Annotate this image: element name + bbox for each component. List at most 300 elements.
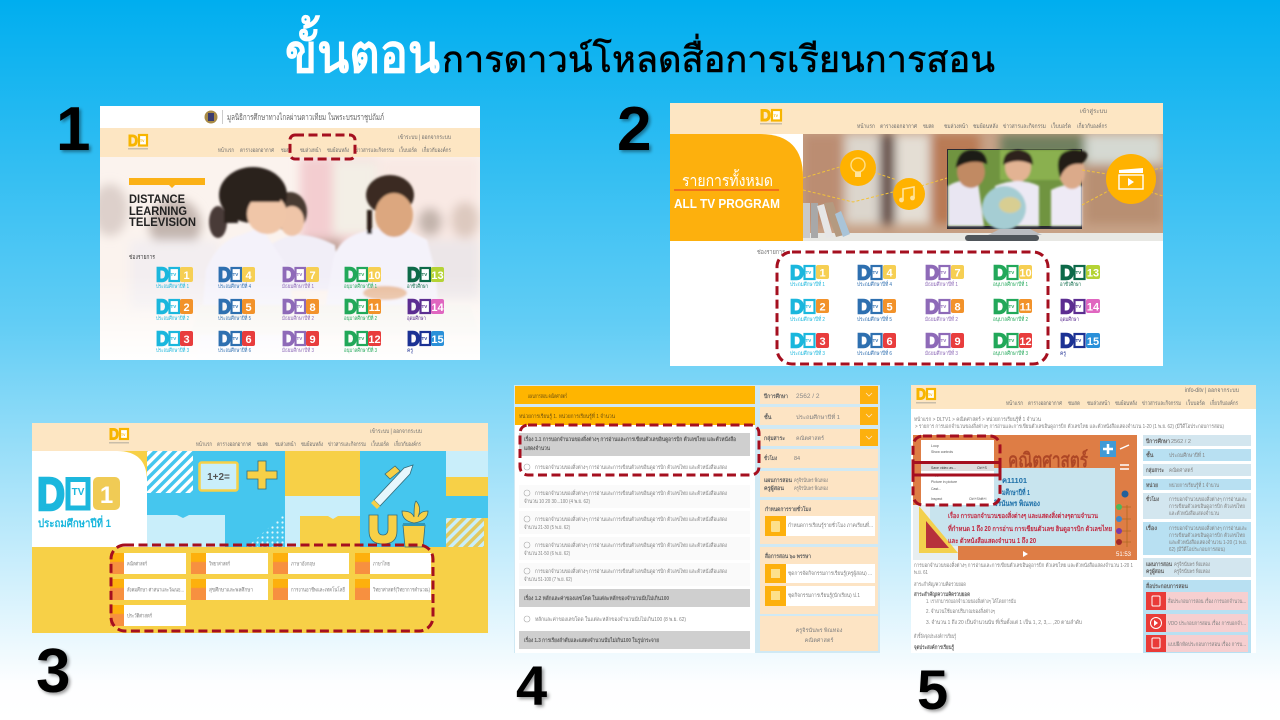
channel logo grid: TV bbox=[872, 270, 878, 275]
channel logo grid: D bbox=[993, 296, 1007, 318]
channel logo grid: D bbox=[282, 296, 295, 318]
icon: music note bbox=[893, 178, 925, 210]
navigation bar: ชมย้อนหลัง bbox=[301, 441, 323, 448]
video frame: ที่กำหนด 1 ถึง 20 การอ่าน การเขียนตัวเลข ฮินดูอารบิก ตัวเลขไทย bbox=[948, 523, 1112, 534]
description text: การบอกจำนวนของสิ่งต่างๆ การอ่านและการเขียนตัวเลขฮินดูอารบิก ตัวเลขไทย และตัวหนังสือแสดงจำนวน 1-20 1 bbox=[914, 561, 1133, 569]
channel logo grid: 2 bbox=[819, 302, 826, 314]
channel logo grid: D bbox=[790, 296, 804, 318]
icon: light bulb bbox=[840, 150, 876, 186]
browser context menu: Inspect bbox=[931, 497, 942, 501]
channel logo grid: D bbox=[218, 264, 231, 286]
channel logo grid: D bbox=[790, 262, 804, 284]
channel logo grid: D bbox=[1060, 330, 1074, 352]
channel logo grid: TV bbox=[170, 304, 176, 309]
video info sidebar: ครูจิรนันพร พิณทอง bbox=[1174, 561, 1210, 568]
channel logo grid: D bbox=[925, 330, 939, 352]
channel logo grid: 10 bbox=[1019, 268, 1032, 280]
channel logo grid: 5 bbox=[886, 302, 893, 314]
filter sidebar: ชุดกิจกรรมการเรียนรู้(นักเรียน) ป.1 bbox=[788, 592, 860, 599]
channel logo grid: 6 bbox=[245, 334, 252, 346]
description text: สาระสำคัญ/ความคิดรวบยอด bbox=[914, 591, 970, 598]
navigation bar: ตารางออกอากาศ bbox=[217, 441, 251, 448]
grade logo block: TV bbox=[72, 487, 85, 498]
panel: step 1 website home page bbox=[92, 106, 480, 360]
channel logo grid: TV bbox=[296, 304, 302, 309]
channel logo grid: 2 bbox=[183, 302, 190, 314]
channel logo grid: อุดมศึกษา bbox=[407, 315, 426, 322]
navigation bar: ตารางออกอากาศ bbox=[240, 147, 274, 154]
video info sidebar: และตัวหนังสือแสดงจำนวน bbox=[1169, 510, 1219, 517]
video frame: 51:53 bbox=[1116, 552, 1132, 558]
browser context menu: Save video as... bbox=[931, 466, 956, 470]
navigation bar: ชมย้อนหลัง bbox=[1115, 400, 1137, 407]
lesson list column: การบอกจำนวนของสิ่งต่างๆ การอ่านและการเขียนตัวเลขฮินดูอารบิก ตัวเลขไทย และตัวหนังสือแสดง bbox=[535, 515, 727, 523]
title: ขั้นตอน bbox=[285, 15, 440, 84]
subject cards: สุขศึกษาและพลศึกษา bbox=[209, 586, 253, 594]
channel logo grid: TV bbox=[1008, 270, 1014, 275]
channel logo grid: มัธยมศึกษาปีที่ 3 bbox=[282, 346, 314, 354]
video info sidebar: ปีการศึกษา bbox=[1145, 437, 1170, 445]
grade logo block: D bbox=[37, 468, 65, 520]
video frame: ค11101 bbox=[1002, 476, 1027, 485]
channel logo grid: TV bbox=[806, 304, 811, 309]
lesson list column: การบอกจำนวนของสิ่งต่างๆ การอ่านและการเขียนตัวเลขฮินดูอารบิก ตัวเลขไทย และตัวหนังสือแสดง bbox=[535, 567, 727, 575]
channel logo grid: 13 bbox=[1087, 268, 1099, 280]
channel logo grid: 11 bbox=[369, 302, 380, 314]
channel logo grid: TV bbox=[358, 304, 364, 309]
channel logo grid: มัธยมศึกษาปีที่ 3 bbox=[925, 349, 958, 357]
subject cards: ภาษาอังกฤษ bbox=[291, 560, 315, 568]
step number 4: 4 bbox=[516, 654, 547, 717]
channel logo grid: D bbox=[156, 296, 169, 318]
filter sidebar: ปีการศึกษา bbox=[763, 392, 788, 400]
subject cards: วิทยาศาสตร์ bbox=[208, 560, 230, 568]
channel logo grid: D bbox=[407, 296, 420, 318]
video frame: จิรนันพร พิณทอง bbox=[993, 499, 1040, 508]
navigation bar: TV bbox=[140, 139, 145, 143]
browser context menu: Ctrl+Shift+I bbox=[969, 497, 987, 501]
subject cards bbox=[110, 553, 431, 626]
navigation bar bbox=[32, 423, 488, 451]
orange title block: ALL TV PROGRAM bbox=[674, 197, 780, 211]
channel logo grid: D bbox=[407, 328, 420, 350]
video info sidebar: การบอกจำนวนของสิ่งต่างๆ การอ่านและ bbox=[1169, 524, 1247, 532]
channel logo grid: 12 bbox=[368, 334, 381, 346]
step number 5: 5 bbox=[917, 658, 948, 720]
filter sidebar: ครูจิรนันพร พิณทอง bbox=[794, 477, 828, 484]
channel logo grid: 5 bbox=[245, 302, 252, 314]
filter sidebar: แผนการสอน bbox=[764, 477, 792, 484]
channel logo grid: TV bbox=[940, 304, 946, 309]
icon: magnet bbox=[369, 515, 397, 544]
channel logo grid: 9 bbox=[309, 334, 316, 346]
description text bbox=[914, 561, 1133, 652]
channel logo grid: D bbox=[790, 330, 804, 352]
callout: context menu area bbox=[913, 436, 1000, 505]
navigation bar: หน้าแรก bbox=[218, 147, 234, 154]
navigation bar: เข้าระบบ | ออกจากระบบ bbox=[370, 428, 422, 435]
channel logo grid: TV bbox=[232, 272, 238, 277]
video info sidebar: การเขียนตัวเลขฮินดูอารบิก ตัวเลขไทย bbox=[1169, 532, 1245, 539]
channel logo grid: 13 bbox=[431, 270, 444, 282]
channel logo grid: TV bbox=[1008, 338, 1014, 343]
video info sidebar: และตัวหนังสือแสดงจำนวน 1-20 (1 พ.ย. bbox=[1169, 539, 1247, 546]
video info sidebar: VDO ประกอบการสอน เรื่อง การบอกจำ... bbox=[1168, 619, 1246, 627]
channel logo grid: D bbox=[156, 264, 169, 286]
channel logo grid: 15 bbox=[1087, 336, 1099, 348]
channel logo grid: D bbox=[857, 296, 871, 318]
video info sidebar: ชั่วโมง bbox=[1146, 495, 1159, 503]
panel: step 3 grade 1 subject page bbox=[32, 423, 488, 633]
channel logo grid: TV bbox=[296, 272, 302, 277]
video info sidebar: 62) (มีวีดีโอประกอบการสอน) bbox=[1169, 545, 1225, 553]
video info sidebar: ประถมศึกษาปีที่ 1 bbox=[1169, 451, 1205, 459]
video info sidebar: คณิตศาสตร์ bbox=[1169, 467, 1193, 474]
callout: highlighted channels bbox=[777, 252, 1048, 364]
icon: chalkboard bbox=[200, 462, 238, 490]
grade logo block: ประถมศึกษาปีที่ 1 bbox=[38, 515, 111, 530]
navigation bar: เว็บบอร์ด bbox=[1051, 121, 1071, 130]
browser context menu: Ctrl+S bbox=[977, 466, 987, 470]
browser context menu: Loop bbox=[931, 444, 939, 448]
hero photo: students in classroom bbox=[100, 157, 480, 324]
channel logo grid: D bbox=[344, 296, 357, 318]
lesson list column: การบอกจำนวนของสิ่งต่างๆ การอ่านและการเขียนตัวเลขฮินดูอารบิก ตัวเลขไทย และตัวหนังสือแสดง bbox=[535, 489, 727, 497]
navigation bar: ข่าวสารและกิจกรรม bbox=[1003, 123, 1046, 130]
video info sidebar: ครูจิรนันพร พิณทอง bbox=[1174, 568, 1210, 575]
navigation bar: ตารางออกอากาศ bbox=[1028, 400, 1062, 407]
video info sidebar: แผนการสอน bbox=[1146, 561, 1172, 568]
channel logo grid: มัธยมศึกษาปีที่ 2 bbox=[925, 315, 958, 323]
channel logo grid: TV bbox=[806, 270, 811, 275]
lesson list column: จำนวน 51-100 (7 พ.ย. 62) bbox=[524, 576, 572, 583]
channel logo grid: 10 bbox=[368, 270, 381, 282]
browser context menu: Picture in picture bbox=[931, 480, 957, 484]
lesson list column: หน่วยการเรียนรู้ 1. หน่วยการเรียนรู้ที่ 1 จำนวน bbox=[519, 412, 615, 420]
filter sidebar: ครูจิรนันพร พิณทอง bbox=[796, 627, 843, 634]
navigation bar: ชมสด bbox=[281, 147, 291, 154]
navigation bar: ชมล่วงหน้า bbox=[300, 147, 321, 154]
decorative banner art bbox=[147, 451, 488, 547]
channel heading: ช่องรายการ bbox=[757, 249, 785, 256]
video info sidebar: 2562 / 2 bbox=[1171, 439, 1191, 445]
lesson list column: จำนวน 31-50 (6 พ.ย. 62) bbox=[524, 550, 570, 557]
description text: จุดประสงค์การเรียนรู้ bbox=[914, 643, 954, 652]
channel logo grid: ครู bbox=[1060, 351, 1066, 357]
navigation bar: ข่าวสารและกิจกรรม bbox=[328, 441, 366, 448]
channel logo grid: 15 bbox=[431, 334, 444, 346]
channel logo grid: 9 bbox=[954, 336, 961, 348]
navigation bar: เว็บบอร์ด bbox=[371, 439, 389, 448]
channel logo grid: อนุบาลศึกษาปีที่ 1 bbox=[993, 280, 1028, 288]
banner photo with TV bbox=[803, 134, 1163, 241]
navigation bar: หน้าแรก bbox=[1006, 400, 1023, 407]
lesson list column: เรื่อง 1.3 การเรียงลำดับและแสดงจำนวนนับไม่เกิน100 ในรูปกระจาย bbox=[524, 636, 659, 645]
navigation bar: ตารางออกอากาศ bbox=[880, 123, 917, 130]
callout: highlighted menu items bbox=[290, 135, 355, 159]
channel logo grid: D bbox=[925, 296, 939, 318]
navigation bar: ชมล่วงหน้า bbox=[1087, 400, 1110, 407]
panel: step 4 lesson plan page bbox=[514, 385, 880, 653]
lesson list column: เรื่อง 1.1 การบอกจำนวนของสิ่งต่างๆ การอ่านและการเขียนตัวเลขฮินดูอารบิก ตัวเลขไทย และตัวหนังสือ bbox=[524, 435, 736, 444]
navigation bar: ชมล่วงหน้า bbox=[944, 123, 968, 130]
Distance Learning Television logotype: TELEVISION bbox=[129, 217, 196, 229]
channel logo grid: ประถมศึกษาปีที่ 1 bbox=[790, 280, 825, 288]
channel logo grid: TV bbox=[1076, 270, 1081, 275]
channel logo grid: TV bbox=[170, 336, 176, 341]
channel logo grid: 1 bbox=[819, 268, 826, 280]
channel logo grid: D bbox=[407, 264, 420, 286]
navigation bar: ข่าวสารและกิจกรรม bbox=[355, 147, 394, 154]
navigation bar: TV bbox=[774, 114, 779, 118]
callout: highlighted lesson bbox=[520, 425, 759, 475]
channel logo grid: TV bbox=[422, 304, 427, 309]
channel logo grid: TV bbox=[1076, 338, 1081, 343]
video info sidebar: แบบฝึกหัดประกอบการสอน เรื่อง การบ... bbox=[1168, 640, 1246, 648]
channel logo grid: TV bbox=[170, 272, 176, 277]
channel logo grid: TV bbox=[872, 338, 878, 343]
channel logo grid: TV bbox=[806, 338, 811, 343]
video info sidebar bbox=[1143, 435, 1251, 653]
channel logo grid: TV bbox=[358, 272, 364, 277]
channel logo grid: มัธยมศึกษาปีที่ 1 bbox=[282, 282, 314, 290]
channel logo grid: D bbox=[282, 264, 295, 286]
browser context menu: Show controls bbox=[931, 450, 953, 454]
channel logo grid: D bbox=[857, 330, 871, 352]
channel logo grid bbox=[790, 262, 1100, 357]
description text: 1. เราสามารถบอกจำนวนของสิ่งต่างๆ ได้โดยการนับ bbox=[926, 597, 1016, 605]
filter sidebar: 2562 / 2 bbox=[796, 393, 820, 400]
video info sidebar: เรื่อง bbox=[1146, 524, 1157, 532]
lesson list column: แสดงจำนวน bbox=[524, 445, 550, 452]
video info sidebar: หน่วยการเรียนรู้ที่ 1 จำนวน bbox=[1169, 481, 1219, 489]
channel logo grid: TV bbox=[1008, 304, 1014, 309]
navigation bar: info-ditv | ออกจากระบบ bbox=[1185, 387, 1239, 394]
channel logo grid: D bbox=[344, 328, 357, 350]
channel logo grid: TV bbox=[940, 270, 946, 275]
channel logo grid: TV bbox=[940, 338, 946, 343]
subject cards: คณิตศาสตร์ bbox=[127, 560, 147, 568]
icon: pencil and eraser bbox=[371, 465, 413, 509]
navigation bar bbox=[911, 385, 1256, 409]
video info sidebar: หน่วย bbox=[1146, 482, 1158, 489]
callout: save video menu highlight bbox=[913, 462, 1000, 475]
description text: 2. จำนวนใช้บอกปริมาณของสิ่งต่างๆ bbox=[926, 607, 995, 615]
channel logo grid: อาชีวศึกษา bbox=[407, 283, 428, 290]
navigation bar: เกี่ยวกับองค์กร bbox=[422, 146, 452, 154]
filter sidebar: กลุ่มสาระ bbox=[764, 435, 785, 442]
channel logo grid: ประถมศึกษาปีที่ 6 bbox=[218, 346, 251, 354]
channel logo grid: ประถมศึกษาปีที่ 1 bbox=[156, 282, 189, 290]
subject cards: สังคมศึกษา ศาสนาและวัฒนธ... bbox=[127, 586, 184, 594]
navigation bar: D bbox=[760, 107, 771, 125]
lesson list column: หลักและค่าของเลขโดด ในแต่ละหลักของจำนวนนับไม่เกิน100 (8 พ.ย. 62) bbox=[535, 615, 686, 623]
browser context menu: Cast... bbox=[931, 487, 941, 491]
top foundation banner bbox=[204, 110, 384, 124]
channel logo grid: D bbox=[156, 328, 169, 350]
channel logo grid: 14 bbox=[1087, 302, 1100, 314]
video frame bbox=[913, 435, 1137, 560]
channel logo grid: TV bbox=[872, 304, 878, 309]
lesson list column: การบอกจำนวนของสิ่งต่างๆ การอ่านและการเขียนตัวเลขฮินดูอารบิก ตัวเลขไทย และตัวหนังสือแสดง bbox=[535, 463, 727, 471]
channel logo grid: TV bbox=[232, 304, 238, 309]
grade logo block: 1 bbox=[100, 482, 113, 509]
channel logo grid: D bbox=[925, 262, 939, 284]
video info sidebar: การบอกจำนวนของสิ่งต่างๆ การอ่านและ bbox=[1169, 495, 1247, 503]
navigation bar: เข้าระบบ | ออกจากระบบ bbox=[398, 134, 451, 141]
navigation bar: ชมสด bbox=[1068, 400, 1080, 407]
browser context menu: Copy video address bbox=[931, 473, 962, 477]
filter sidebar: ประถมศึกษาปีที่ 1 bbox=[796, 413, 840, 421]
channel logo grid: มัธยมศึกษาปีที่ 1 bbox=[925, 280, 958, 288]
callout: highlighted subjects bbox=[111, 545, 433, 631]
subject cards: ประวัติศาสตร์ bbox=[127, 612, 152, 620]
channel logo grid: อนุบาลศึกษาปีที่ 1 bbox=[344, 282, 377, 290]
channel logo grid: TV bbox=[232, 336, 238, 341]
breadcrumb: หน้าแรก > DLTV1 > คณิตศาสตร์ > หน่วยการเรียนรู้ที่ 1 จำนวน bbox=[914, 415, 1041, 423]
navigation bar: D bbox=[128, 133, 138, 150]
channel logo grid: 3 bbox=[819, 336, 826, 348]
channel logo grid: D bbox=[1060, 262, 1074, 284]
channel logo grid: 3 bbox=[183, 334, 190, 346]
channel logo grid: ประถมศึกษาปีที่ 6 bbox=[857, 349, 892, 357]
video info sidebar: สื่อประกอบการสอน bbox=[1145, 582, 1188, 590]
channel logo grid: อุดมศึกษา bbox=[1060, 316, 1079, 323]
description text: 3. จำนวน 1 ถึง 20 เป็นจำนวนนับ ที่เริ่มตั้งแต่ 1 เป็น 1, 2, 3,... ,20 ตามลำดับ bbox=[926, 618, 1082, 626]
step number 1: 1 bbox=[56, 95, 90, 164]
video frame: เรื่อง การบอกจำนวนของสิ่งต่างๆ และแสดงสิ่งต่างๆตามจำนวน bbox=[948, 510, 1098, 520]
video info sidebar: การเขียนตัวเลขฮินดูอารบิก ตัวเลขไทย bbox=[1169, 503, 1245, 510]
lesson list column: การบอกจำนวนของสิ่งต่างๆ การอ่านและการเขียนตัวเลขฮินดูอารบิก ตัวเลขไทย และตัวหนังสือแสดง bbox=[535, 541, 727, 549]
channel logo grid: D bbox=[218, 296, 231, 318]
icon: potted plant bbox=[402, 501, 428, 547]
subject cards: วิทยาศาสตร์(วิทยาการคำนวณ) bbox=[372, 586, 430, 594]
Distance Learning Television logotype: LEARNING bbox=[129, 206, 187, 218]
step number 3: 3 bbox=[36, 637, 70, 706]
channel logo grid: ครู bbox=[407, 348, 413, 354]
channel logo grid: D bbox=[857, 262, 871, 284]
navigation bar: ข่าวสารและกิจกรรม bbox=[1142, 400, 1181, 407]
navigation bar: เกี่ยวกับองค์กร bbox=[1210, 399, 1239, 407]
channel logo grid: D bbox=[282, 328, 295, 350]
navigation bar bbox=[670, 103, 1163, 134]
navigation bar: TV bbox=[121, 433, 126, 437]
dashed connector lines bbox=[803, 166, 1163, 205]
navigation bar: D bbox=[109, 426, 119, 444]
channel logo grid: 7 bbox=[954, 268, 961, 280]
video slide title: คณิตศาสตร์ bbox=[1008, 449, 1088, 472]
channel logo grid bbox=[156, 264, 444, 354]
channel logo grid: D bbox=[218, 328, 231, 350]
filter sidebar: ชั้น bbox=[764, 412, 772, 421]
video frame: และ ตัวหนังสือแสดงจำนวน 1 ถึง 20 bbox=[948, 536, 1036, 545]
grade logo block bbox=[32, 451, 147, 547]
filter sidebar: 84 bbox=[794, 456, 800, 462]
TV set bbox=[947, 149, 1087, 241]
channel logo grid: อนุบาลศึกษาปีที่ 2 bbox=[344, 314, 377, 322]
channel logo grid: 4 bbox=[886, 268, 893, 280]
channel logo grid: อาชีวศึกษา bbox=[1060, 281, 1081, 288]
navigation bar: ชมย้อนหลัง bbox=[973, 123, 998, 130]
navigation bar: เข้าสู่ระบบ bbox=[1080, 108, 1107, 115]
navigation bar: หน้าแรก bbox=[196, 441, 212, 448]
browser context menu bbox=[921, 440, 994, 505]
navigation bar: ชมล่วงหน้า bbox=[275, 441, 296, 448]
channel logo grid: 6 bbox=[886, 336, 893, 348]
channel logo grid: TV bbox=[422, 272, 427, 277]
navigation bar: เกี่ยวกับองค์กร bbox=[1077, 122, 1108, 130]
channel logo grid: อนุบาลศึกษาปีที่ 3 bbox=[993, 349, 1028, 357]
channel logo grid: ประถมศึกษาปีที่ 4 bbox=[218, 282, 251, 290]
channel logo grid: D bbox=[993, 330, 1007, 352]
channel logo grid: D bbox=[993, 262, 1007, 284]
navigation bar: เว็บบอร์ด bbox=[1186, 398, 1205, 407]
orange title block: รายการทั้งหมด bbox=[682, 169, 773, 190]
navigation bar: ชมสด bbox=[923, 123, 934, 130]
channel logo grid: 8 bbox=[954, 302, 961, 314]
channel logo grid: ประถมศึกษาปีที่ 5 bbox=[218, 314, 251, 322]
channel logo grid: ประถมศึกษาปีที่ 3 bbox=[790, 349, 825, 357]
lesson list column: จำนวน 21-30 (5 พ.ย. 62) bbox=[524, 524, 570, 531]
filter sidebar: กำหนดการเรียนรู้รายชั่วโมง ภาคเรียนที่... bbox=[788, 521, 873, 529]
panel: step 5 video page bbox=[911, 385, 1256, 653]
filter sidebar bbox=[760, 386, 878, 651]
channel logo grid: 8 bbox=[309, 302, 316, 314]
channel logo grid: 12 bbox=[1019, 336, 1032, 348]
step number 2: 2 bbox=[617, 95, 651, 164]
icon: film clapper bbox=[1106, 154, 1156, 204]
filter sidebar: ครูจิรนันพร พิณทอง bbox=[794, 485, 828, 492]
channel logo grid: D bbox=[344, 264, 357, 286]
orange title block bbox=[670, 134, 803, 241]
lesson list column bbox=[515, 386, 755, 653]
channel logo grid: TV bbox=[1076, 304, 1081, 309]
icon: chalkboard: 1+2= bbox=[207, 472, 230, 483]
filter sidebar: คณิตศาสตร์ bbox=[805, 637, 833, 644]
navigation bar: ชมย้อนหลัง bbox=[327, 147, 349, 154]
channel logo grid: 1 bbox=[183, 270, 190, 282]
Distance Learning Television logotype: DISTANCE bbox=[129, 194, 185, 206]
video frame: มศึกษาปีที่ 1 bbox=[1002, 486, 1030, 497]
top foundation banner: มูลนิธิการศึกษาทางไกลผ่านดาวเทียม ในพระบรมราชูปถัมภ์ bbox=[227, 112, 384, 123]
video info sidebar: ชั้น bbox=[1146, 450, 1154, 459]
subject cards: การงานอาชีพและเทคโนโลยี bbox=[291, 586, 345, 594]
navigation bar: TV bbox=[928, 393, 933, 397]
stack of books bbox=[803, 202, 850, 238]
video info sidebar: ครูผู้สอน bbox=[1146, 567, 1164, 576]
description text: พ.ย. 61 bbox=[914, 570, 928, 576]
title: การดาวน์โหลดสื่อการเรียนการสอน bbox=[442, 33, 995, 80]
navigation bar: เกี่ยวกับองค์กร bbox=[394, 440, 422, 448]
channel logo grid: อนุบาลศึกษาปีที่ 3 bbox=[344, 346, 377, 354]
lesson list column: แผนการสอน คณิตศาสตร์ bbox=[528, 392, 567, 400]
filter sidebar: ชุดการจัดกิจกรรมการเรียนรู้(ครูผู้สอน) ... bbox=[788, 570, 872, 577]
filter sidebar: กำหนดการรายชั่วโมง bbox=[765, 505, 811, 513]
filter sidebar: คณิตศาสตร์ bbox=[796, 435, 824, 442]
channel logo grid: ประถมศึกษาปีที่ 4 bbox=[857, 280, 892, 288]
video info sidebar: สื่อประกอบการสอน เรื่อง การบอกจำนวน... bbox=[1168, 597, 1246, 605]
channel logo grid: TV bbox=[296, 336, 302, 341]
navigation bar: เว็บบอร์ด bbox=[399, 145, 417, 154]
navigation bar: ชมสด bbox=[257, 441, 268, 448]
lesson list column: เรื่อง 1.2 หลักและค่าของเลขโดด ในแต่ละหลักของจำนวนนับไม่เกิน100 bbox=[524, 594, 669, 602]
channel logo grid: ประถมศึกษาปีที่ 3 bbox=[156, 346, 189, 354]
breadcrumb bbox=[914, 415, 1224, 430]
panel: step 2 all TV programs page bbox=[670, 103, 1163, 366]
navigation bar: หน้าแรก bbox=[857, 123, 875, 130]
channel logo grid: TV bbox=[358, 336, 364, 341]
channel logo grid: TV bbox=[422, 336, 427, 341]
